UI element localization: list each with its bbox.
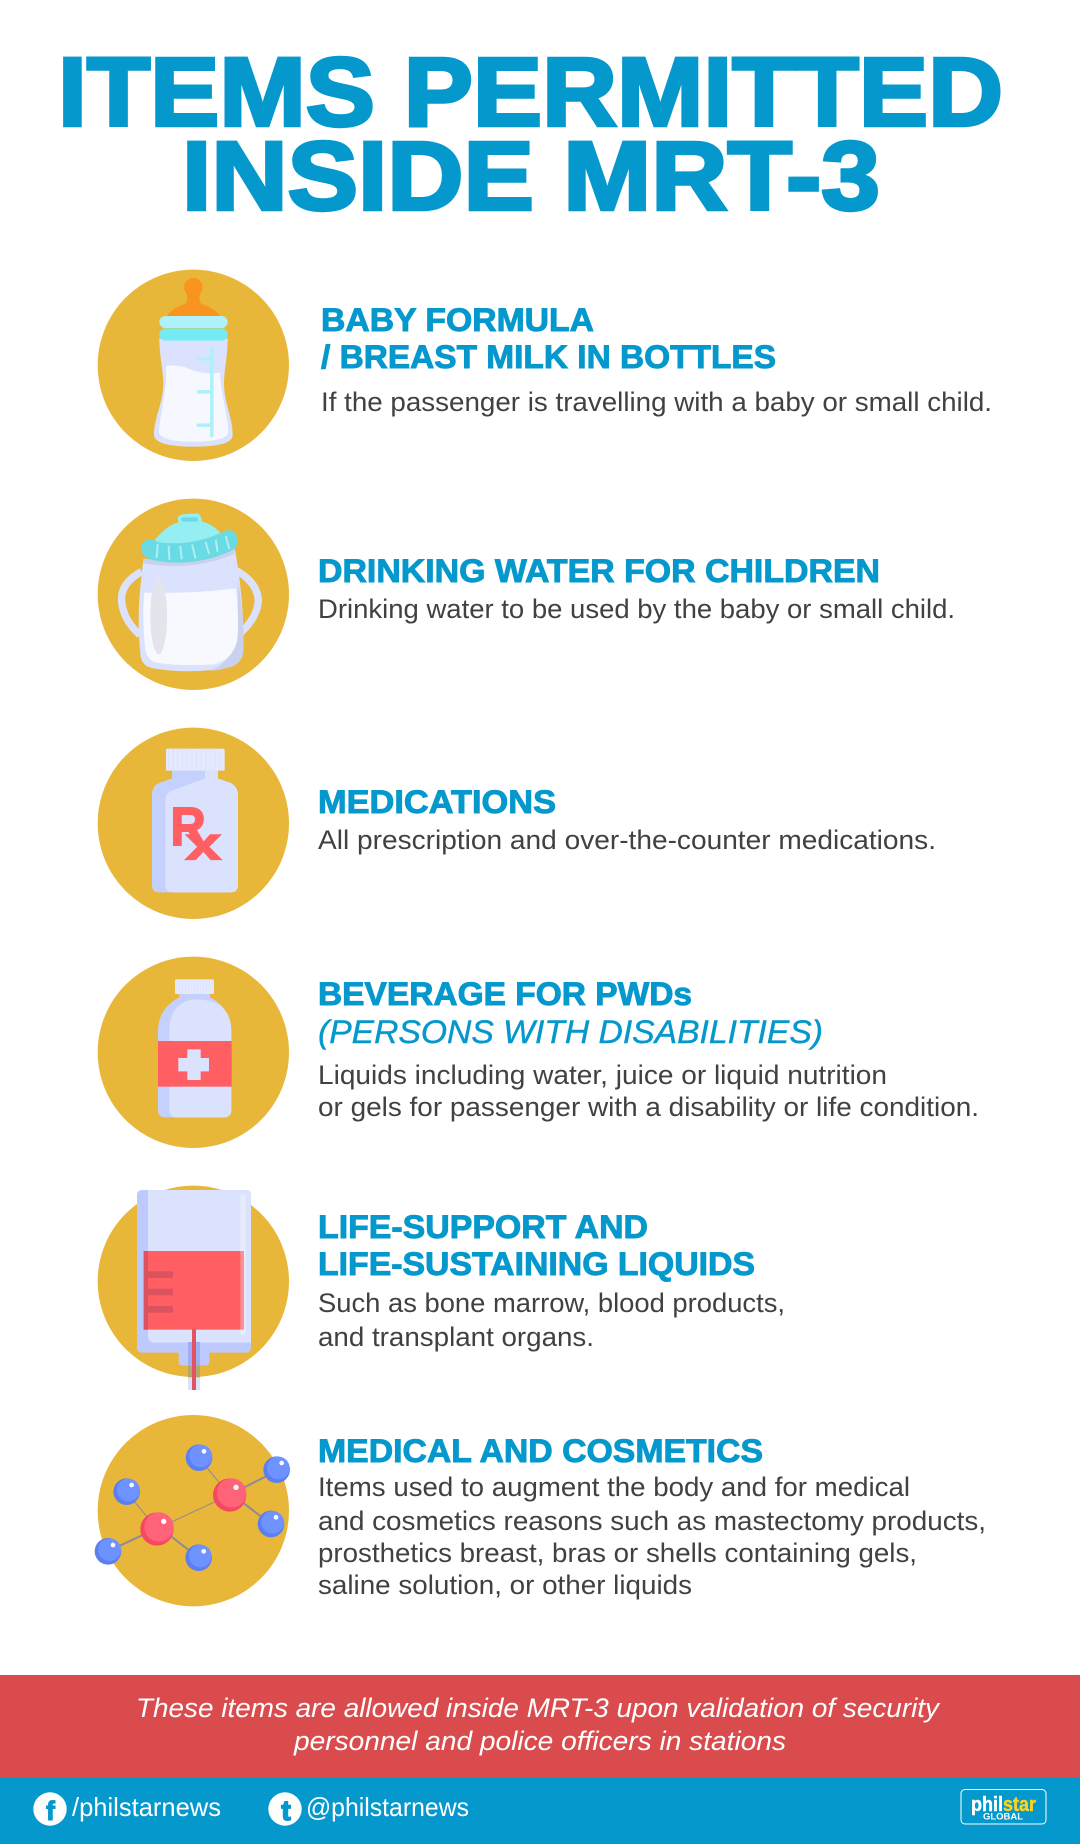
icon: baby bottle — [98, 270, 289, 461]
heading: DRINKING WATER FOR CHILDREN — [318, 553, 880, 589]
callout: validation note: These items are allowed inside MRT-3 upon validation of security — [136, 1693, 941, 1723]
item: baby formula — [98, 270, 992, 461]
title: INSIDE MRT-3 — [182, 121, 880, 230]
description: If the passenger is travelling with a baby or small child. — [321, 387, 992, 417]
icon: twitter: t — [281, 1795, 291, 1826]
description: saline solution, or other liquids — [318, 1570, 692, 1600]
icon: sippy cup — [98, 499, 289, 690]
description: prosthetics breast, bras or shells containing gels, — [318, 1538, 917, 1568]
description: Items used to augment the body and for medical — [318, 1472, 910, 1502]
heading: MEDICAL AND COSMETICS — [318, 1433, 763, 1469]
item: life-support liquids — [98, 1186, 785, 1390]
logo: philstar global: phil — [971, 1794, 1003, 1816]
description: Drinking water to be used by the baby or small child. — [318, 594, 955, 624]
logo: philstar global — [961, 1790, 1046, 1824]
icon: facebook: f — [46, 1796, 56, 1826]
heading: MEDICATIONS — [318, 784, 556, 820]
description: Liquids including water, juice or liquid nutrition — [318, 1060, 887, 1090]
heading — [318, 976, 823, 1050]
item: medications — [98, 728, 936, 919]
icon: blood bag — [98, 1186, 289, 1390]
heading — [318, 1209, 755, 1282]
heading: LIFE-SUSTAINING LIQUIDS — [318, 1246, 755, 1282]
icon: molecule — [95, 1415, 290, 1606]
icon: facebook — [33, 1792, 67, 1826]
heading: LIFE-SUPPORT AND — [318, 1209, 648, 1245]
callout: validation note — [0, 1675, 1080, 1777]
icon: medicine bottle — [98, 957, 289, 1148]
icon: prescription bottle: x — [185, 817, 221, 869]
description: Such as bone marrow, blood products, — [318, 1288, 785, 1318]
facebook handle: /philstarnews — [72, 1792, 221, 1822]
description — [318, 1288, 785, 1352]
description: or gels for passenger with a disability or life condition. — [318, 1092, 979, 1122]
heading: (PERSONS WITH DISABILITIES) — [318, 1014, 823, 1050]
title — [58, 37, 1003, 230]
item: medical and cosmetics — [95, 1415, 986, 1606]
title: ITEMS PERMITTED — [58, 37, 1003, 146]
twitter handle: @philstarnews — [306, 1792, 469, 1822]
icon: prescription bottle: R — [171, 797, 206, 857]
heading — [321, 302, 776, 375]
description — [318, 1060, 979, 1122]
heading: / BREAST MILK IN BOTTLES — [321, 339, 776, 375]
footer — [0, 1777, 1080, 1844]
icon: prescription bottle — [98, 728, 289, 919]
description: All prescription and over-the-counter medications. — [318, 825, 936, 855]
logo: philstar global: star — [1003, 1794, 1036, 1816]
description: and cosmetics reasons such as mastectomy products, — [318, 1506, 986, 1536]
icon: twitter — [268, 1792, 302, 1826]
callout: validation note: personnel and police officers in stations — [293, 1726, 786, 1756]
description — [318, 1472, 986, 1600]
logo: philstar global: GLOBAL — [983, 1812, 1024, 1822]
item: drinking water — [98, 499, 955, 690]
heading: BABY FORMULA — [321, 302, 594, 338]
description: and transplant organs. — [318, 1322, 594, 1352]
heading: BEVERAGE FOR PWDs — [318, 976, 692, 1012]
item: beverage for PWDs — [98, 957, 979, 1148]
